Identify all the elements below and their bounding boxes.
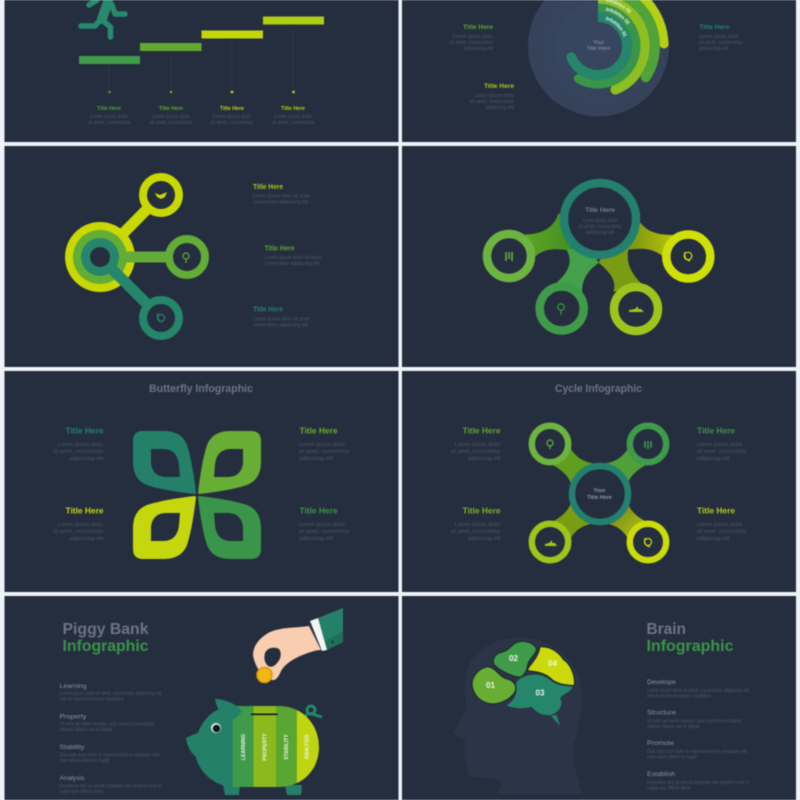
item: develope: sed do eiusmod tempor incididunt — [647, 694, 712, 700]
caption bottom left: adipiscing elit — [468, 536, 501, 542]
icon: phone clock — [684, 252, 692, 261]
panel: five node metaball — [402, 146, 796, 367]
heading: Cycle Infographic — [555, 383, 642, 395]
heading: Infographic — [646, 638, 734, 655]
stripe labels — [241, 733, 310, 761]
caption bottom right: Lorem ipsum dolor — [299, 522, 345, 528]
step caption 2: Lorem ipsum dolor — [152, 114, 190, 120]
node centre — [572, 466, 628, 522]
step caption 4: Lorem ipsum dolor — [274, 114, 312, 120]
caption top right: Title Here — [697, 426, 735, 436]
item: learning — [60, 683, 162, 702]
caption bottom left: Title Here — [462, 506, 501, 516]
item: stability: Duis aute irure dolor in reprehenderit in voluptate velit — [60, 752, 160, 758]
pig legs — [223, 785, 302, 795]
item: develope — [647, 679, 750, 700]
icon: hand — [545, 540, 557, 546]
spoke top — [65, 177, 179, 292]
step 4 — [263, 16, 324, 24]
item: stability: esse cillum dolore eu fugiat — [60, 758, 110, 764]
heading: Infographic — [62, 638, 149, 655]
icon: hand with coin — [253, 608, 343, 682]
arc labels — [605, 0, 632, 38]
step connector lines — [231, 24, 294, 39]
pig eye — [211, 723, 221, 733]
step caption 4 — [272, 106, 315, 126]
item: property: Ut enim ad minim veniam, quis nostrud exercitation — [60, 722, 155, 728]
hub caption 3: Title Here — [253, 306, 283, 314]
radial caption right: adipiscing elit — [699, 46, 729, 52]
stripe labels: LEARNING — [241, 734, 247, 760]
step caption 1: Lorem ipsum dolor — [90, 114, 128, 120]
caption top right: adipiscing elit — [299, 456, 334, 462]
icon: handshake — [155, 192, 167, 199]
node top right — [630, 426, 666, 462]
coin slot — [251, 714, 278, 715]
radial caption right — [699, 24, 743, 52]
item: develope: Lorem ipsum dolor sit amet, consectetur adipiscing elit — [647, 688, 750, 694]
radial background discs — [528, 0, 669, 116]
hub caption 3: consectetur adipiscing elit — [253, 322, 309, 328]
heading — [62, 621, 149, 655]
heading — [646, 621, 734, 655]
hub caption 1: consectetur adipiscing elit — [253, 200, 309, 206]
caption top right: Title Here — [300, 426, 338, 436]
caption bottom left — [52, 506, 104, 542]
radial caption lower: sit amet, consectetur — [470, 99, 514, 105]
item: structure: Ut enim ad minim veniam, quis nostrud exercitation — [647, 718, 742, 724]
step 1 — [79, 56, 140, 64]
caption bottom left: Title Here — [66, 506, 104, 516]
icon: people — [645, 441, 651, 449]
hub caption 2: Title Here — [264, 246, 295, 252]
hub caption 1 — [253, 184, 311, 206]
hub caption 2 — [264, 246, 322, 267]
item: promote — [647, 740, 748, 760]
centre text — [587, 488, 612, 501]
node bottom left — [532, 524, 568, 560]
caption bottom left: adipiscing elit — [70, 536, 104, 542]
icon: running figure — [81, 0, 125, 37]
node top left — [532, 426, 568, 462]
radial caption left: adipiscing elit — [464, 46, 494, 52]
spoke bottom — [81, 238, 179, 336]
caption top right: sit amet, consectetur — [299, 449, 350, 455]
caption bottom right: Lorem ipsum dolor — [696, 522, 743, 528]
item: learning: Learning — [60, 683, 87, 690]
panel: brain — [402, 596, 796, 800]
caption bottom left: Lorem ipsum dolor — [58, 522, 104, 528]
centre text: Lorem ipsum dolor — [582, 218, 618, 224]
panel: piggy bank — [4, 596, 398, 800]
panel: cycle — [402, 371, 796, 592]
lobe numbers: 04 — [548, 659, 557, 668]
connectors — [525, 213, 673, 303]
item: stability: Stability — [60, 744, 85, 751]
caption top left: Title Here — [66, 426, 104, 436]
centre text: sit amet, consectetur — [578, 224, 622, 230]
centre text: Title Here — [585, 207, 615, 214]
panel: butterfly — [4, 371, 398, 592]
radial caption left: Lorem ipsum dolor — [453, 34, 493, 40]
step 2 — [140, 43, 202, 51]
radial caption left: Title Here — [463, 24, 493, 31]
hub caption 1: Lorem ipsum dolor sit amet, — [253, 194, 311, 200]
connectors — [553, 447, 646, 539]
centre text: Your — [593, 488, 606, 494]
pig ear — [215, 699, 242, 720]
radial caption lower: Lorem ipsum dolor — [474, 93, 514, 99]
pig body with stripes — [186, 705, 320, 788]
item: stability — [60, 744, 160, 764]
caption bottom left — [450, 506, 501, 542]
lobe numbers: 03 — [536, 688, 545, 698]
panel: hub and spoke — [4, 146, 398, 367]
stripe labels: STABILITY — [284, 734, 290, 760]
icon: phone clock — [644, 538, 652, 547]
arc labels: Infobites 01 — [605, 16, 628, 38]
radial caption right: Lorem ipsum dolor — [699, 34, 739, 40]
head silhouette — [453, 638, 583, 794]
hub caption 3: Lorem ipsum dolor sit amet, — [253, 316, 311, 322]
item: analysis — [60, 775, 162, 795]
step caption 1 — [88, 106, 131, 126]
radial caption lower: adipiscing elit — [485, 105, 515, 111]
icon: bulb — [558, 304, 564, 315]
step caption 3: sit amet, consectetur — [210, 120, 254, 126]
item: structure: Structure — [647, 710, 676, 716]
item: establish: Excepteur sint occaecat cupidatat non proident sunt in — [647, 780, 749, 786]
node lower left — [540, 286, 584, 330]
caption top right: adipiscing elit — [696, 456, 730, 462]
radial centre label — [587, 40, 610, 52]
heading: Piggy Bank — [62, 621, 149, 638]
item: structure — [647, 710, 742, 730]
caption top right — [299, 426, 350, 462]
item: promote: Duis aute irure dolor in reprehenderit in voluptate velit — [647, 749, 748, 755]
item: learning: Lorem ipsum dolor sit amet, consectetur adipiscing elit — [60, 691, 162, 697]
step caption 3: Title Here — [220, 106, 244, 112]
caption top left: adipiscing elit — [468, 456, 501, 462]
radial caption left — [449, 24, 494, 52]
step caption 1: Title Here — [97, 106, 121, 112]
caption top right: sit amet, consectetur — [696, 449, 747, 455]
caption bottom left: sit amet, consectetur — [450, 529, 501, 535]
step caption 1: sit amet, consectetur — [88, 120, 131, 126]
caption top left: Lorem ipsum dolor — [454, 442, 501, 448]
centre text: Title Here — [587, 495, 612, 501]
petal bottom left — [133, 496, 196, 559]
radial caption left: sit amet, consectetur — [449, 40, 493, 46]
caption top left — [450, 426, 501, 462]
panel: staircase — [4, 0, 398, 142]
petal top left — [133, 431, 196, 494]
caption bottom right — [299, 506, 350, 542]
stripe labels: ANALYSIS — [304, 734, 310, 759]
item: promote: esse cillum dolore eu fugiat — [647, 754, 697, 760]
item: learning: sed do eiusmod tempor incididunt — [60, 696, 124, 702]
item: property: Property — [60, 714, 87, 720]
icon: hand — [629, 306, 644, 312]
brain lobes — [472, 641, 575, 726]
icon: people — [506, 252, 512, 261]
lobe numbers: 02 — [509, 654, 518, 663]
node left — [487, 234, 531, 278]
panel: radial bar — [401, 0, 797, 143]
caption top right: Lorem ipsum dolor — [299, 442, 345, 448]
centre text: adipiscing elit — [586, 230, 615, 236]
radial caption lower: Title Here — [484, 83, 514, 90]
centre text — [578, 207, 622, 236]
petal bottom right — [198, 496, 261, 559]
radial centre label: Your — [593, 40, 604, 46]
node centre — [564, 183, 636, 255]
caption top right — [696, 426, 747, 462]
hub caption 1: Title Here — [253, 184, 283, 191]
caption top left: adipiscing elit — [70, 456, 104, 462]
caption top left — [52, 426, 104, 462]
caption top left: sit amet, consectetur — [450, 449, 501, 455]
step caption 2: Title Here — [159, 106, 183, 112]
item: establish: culpa qui officia dese — [647, 786, 691, 792]
item: promote: Promote — [647, 740, 674, 747]
stripe labels: PROPERTY — [262, 733, 268, 761]
hub caption 2: Lorem ipsum dolor sit amet, — [264, 255, 322, 261]
caption bottom right: Title Here — [300, 506, 338, 516]
lobe numbers — [486, 654, 557, 698]
arc labels: Infobites 02 — [605, 6, 630, 25]
caption bottom left: sit amet, consectetur — [52, 529, 104, 535]
icon: bulb — [183, 253, 189, 263]
node lower right — [614, 287, 658, 331]
item: analysis: Excepteur sint occaecat cupidatat non proident sunt in — [60, 784, 162, 790]
caption bottom right — [696, 506, 747, 542]
radial caption right: sit amet, consectetur — [699, 40, 743, 46]
step caption 4: Title Here — [281, 106, 305, 112]
item: property — [60, 714, 155, 733]
item: establish — [647, 771, 749, 792]
item: establish: Establish — [647, 771, 675, 778]
step caption 2 — [150, 106, 193, 126]
item: property: ullamco laboris nisi ut aliquip — [60, 727, 113, 733]
hub caption 2: consectetur adipiscing elit — [264, 261, 320, 267]
icon: piggy tail — [304, 706, 322, 719]
icon: bulb — [547, 440, 553, 449]
spoke middle — [73, 230, 205, 284]
step dots — [108, 91, 295, 93]
node right — [666, 234, 710, 278]
icon: phone — [158, 313, 164, 322]
radial centre label: Title Here — [587, 46, 610, 52]
caption bottom right: adipiscing elit — [299, 536, 334, 542]
item: structure: ullamco laboris nisi ut aliquip — [647, 724, 700, 730]
caption bottom right: sit amet, consectetur — [299, 529, 350, 535]
radial arcs — [566, 0, 668, 95]
item: analysis: Analysis — [60, 775, 85, 782]
step 3 — [202, 30, 263, 38]
step caption 4: sit amet, consectetur — [272, 120, 315, 126]
step caption 3: Lorem ipsum dolor — [213, 114, 251, 120]
step caption 2: sit amet, consectetur — [150, 120, 193, 126]
item: develope: Develope — [647, 679, 676, 686]
caption top left: Title Here — [462, 426, 501, 436]
caption bottom left: Lorem ipsum dolor — [454, 522, 501, 528]
caption top left: Lorem ipsum dolor — [58, 442, 104, 448]
caption top left: sit amet, consectetur — [52, 449, 104, 455]
hub caption 3 — [253, 306, 311, 328]
node bottom right — [630, 524, 666, 560]
caption top right: Lorem ipsum dolor — [696, 442, 743, 448]
caption bottom right: sit amet, consectetur — [696, 529, 747, 535]
radial caption lower — [470, 83, 515, 111]
heading: Brain — [646, 621, 686, 638]
item: analysis: culpa qui officia dese — [60, 789, 104, 795]
caption bottom right: adipiscing elit — [696, 536, 730, 542]
step caption 3 — [210, 106, 254, 126]
caption bottom right: Title Here — [697, 506, 735, 516]
petal top right — [198, 431, 261, 494]
radial caption right: Title Here — [700, 24, 730, 31]
heading: Butterfly Infographic — [149, 383, 253, 395]
lobe numbers: 01 — [486, 681, 495, 690]
